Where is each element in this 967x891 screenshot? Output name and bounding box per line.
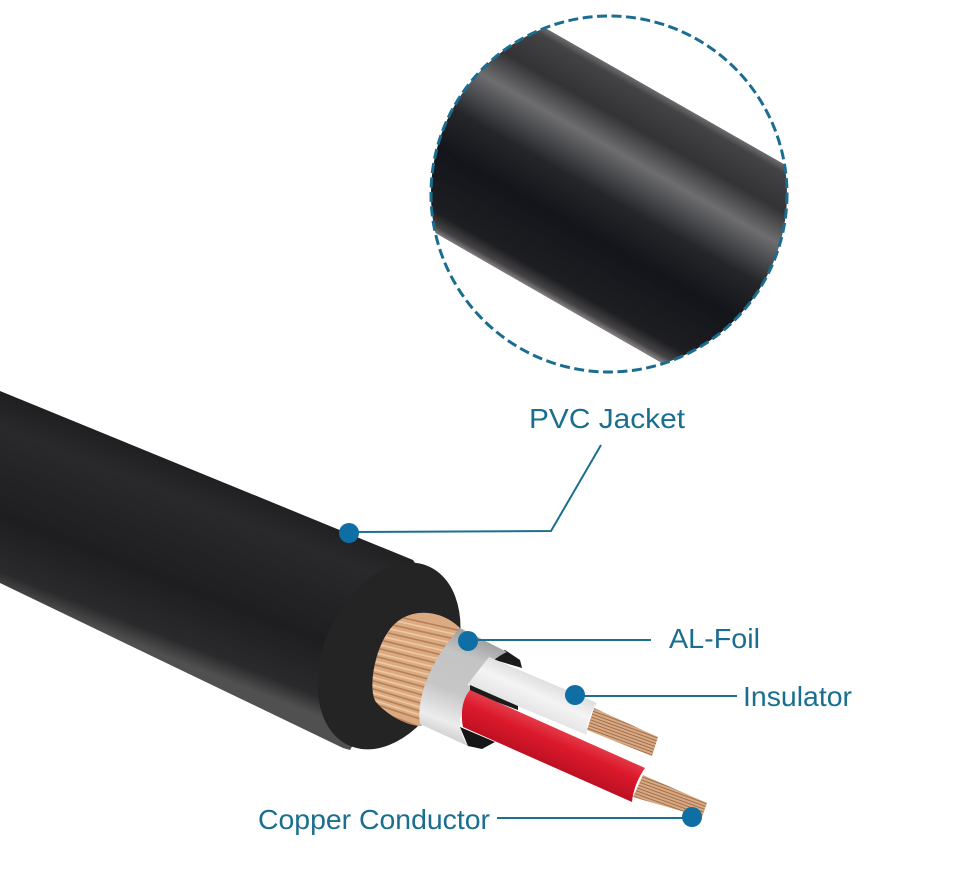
dark lower opening of foil [460, 727, 495, 749]
jacket end face [290, 540, 488, 772]
insulator copper core [587, 708, 658, 756]
panel: zoomed PVC jacket detail [430, 14, 788, 374]
jacket close-up [431, 28, 787, 362]
callout: Insulator leader [565, 685, 737, 705]
label: Copper Conductor: Copper Conductor [258, 804, 490, 835]
dark back of foil tube [490, 650, 522, 668]
foil tube [419, 628, 507, 747]
callout: PVC Jacket leader [339, 445, 601, 543]
callout: AL-Foil leader [458, 631, 651, 651]
black gap [470, 685, 518, 710]
dashed magnifier ring [431, 16, 787, 372]
red wire copper core [633, 775, 707, 817]
outer jacket body [0, 391, 440, 750]
label: AL-Foil: AL-Foil [669, 623, 760, 654]
white insulator [467, 657, 597, 735]
label: PVC Jacket: PVC Jacket [529, 403, 685, 434]
label: Insulator: Insulator [743, 681, 852, 712]
copper braid [368, 613, 462, 727]
cable illustration [0, 391, 707, 817]
callout: Copper Conductor leader [497, 807, 702, 827]
red insulator [462, 690, 645, 802]
